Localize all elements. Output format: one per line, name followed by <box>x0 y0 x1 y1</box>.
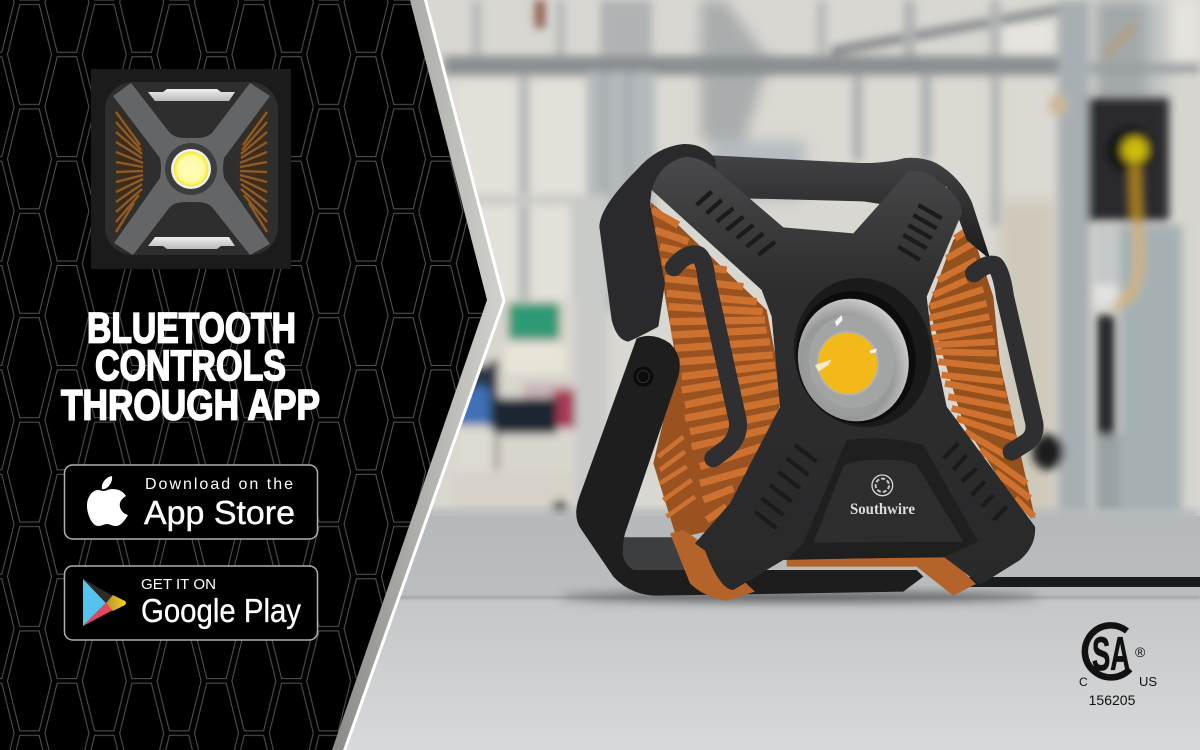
orange heat sink backing <box>650 202 783 538</box>
left black panel <box>0 0 487 750</box>
Google Play button: Google Play <box>141 592 301 629</box>
upper left grip <box>599 144 717 342</box>
structural beams and columns <box>444 0 1200 518</box>
right heat sink fins <box>928 228 1034 517</box>
Google Play button <box>64 566 318 640</box>
CSA certification mark: US <box>1139 674 1157 689</box>
top light bar <box>148 89 235 101</box>
X shaped front housing <box>652 157 1035 590</box>
yellow LED <box>813 328 882 399</box>
center lens <box>165 143 217 195</box>
top handle <box>705 155 991 260</box>
stand pivot button <box>633 367 653 387</box>
Southwire logo <box>850 475 915 518</box>
grip ribs <box>697 192 1007 528</box>
X arms <box>113 83 270 255</box>
App Store button <box>64 465 318 539</box>
folding stand arm <box>576 336 680 577</box>
orange corner feet <box>670 530 755 601</box>
product: Southwire work light <box>576 144 1035 601</box>
Google Play button: GET IT ON <box>141 576 216 593</box>
blurred shelf with coloured bins <box>450 300 575 520</box>
registered mark: ® <box>1135 644 1146 660</box>
concrete floor <box>0 509 1200 750</box>
lower badge panel <box>787 438 978 559</box>
heading: THROUGH APP <box>61 382 320 430</box>
orange fins <box>115 105 268 238</box>
icon: apple <box>87 476 128 526</box>
heading: BLUETOOTH <box>87 304 296 352</box>
side bail handles <box>674 254 1035 458</box>
heading: CONTROLS <box>95 342 286 390</box>
app icon <box>91 69 291 269</box>
App Store button: App Store <box>144 494 295 531</box>
certificate number: 156205 <box>1089 692 1136 708</box>
left heat sink fins <box>652 210 781 520</box>
power cable <box>960 577 1200 587</box>
chevron divider band <box>330 0 505 750</box>
stand bottom bar <box>603 537 923 596</box>
electrical box with yellow connector <box>1032 98 1182 517</box>
CSA certification mark <box>1079 625 1157 708</box>
icon: play triangle <box>83 579 126 626</box>
hexagon pattern <box>0 0 487 750</box>
country marks: C <box>1079 675 1088 689</box>
lens bezel <box>778 263 947 442</box>
heading <box>61 304 320 430</box>
App Store button: Download on the <box>145 476 294 493</box>
bottom light bar <box>148 237 235 249</box>
CSA letters: SA <box>1092 627 1130 680</box>
white chevron line <box>344 0 504 750</box>
Southwire logo: Southwire <box>850 501 915 518</box>
